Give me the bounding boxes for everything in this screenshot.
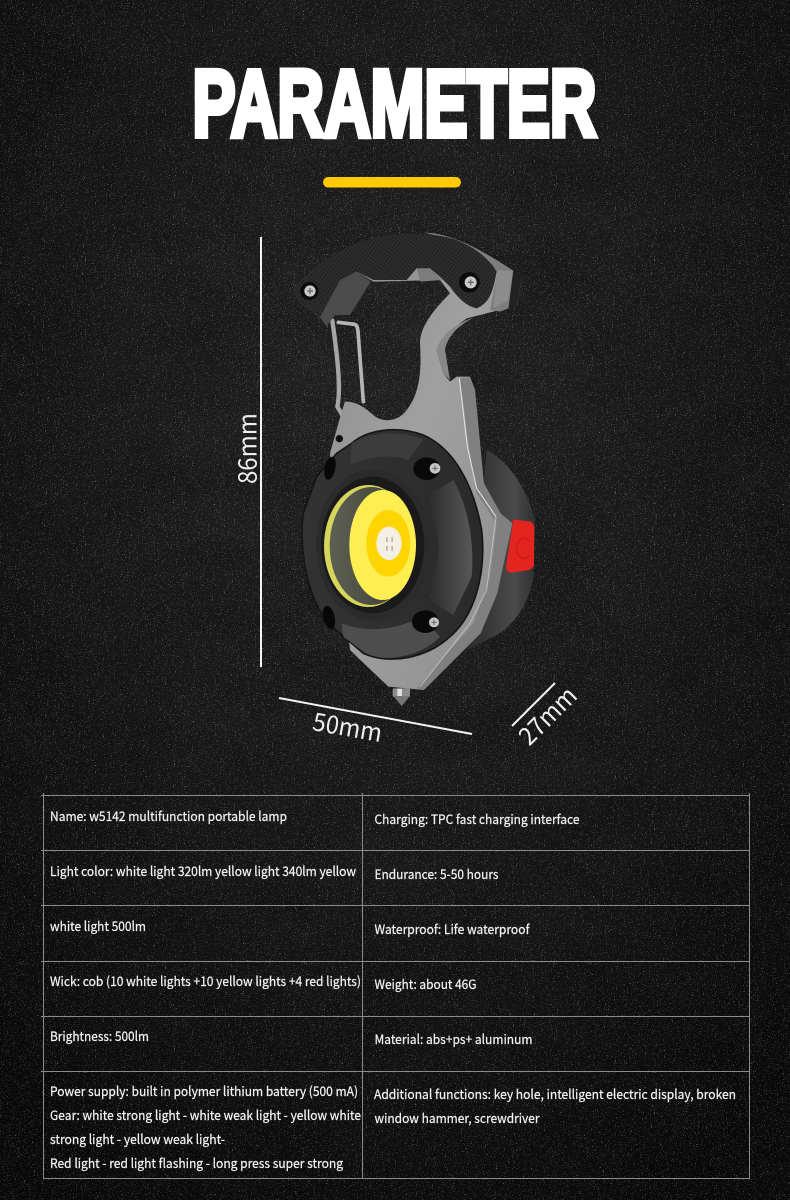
disc bottom facet [342,617,440,658]
handle metal cap [423,233,522,312]
key hole [336,435,343,442]
disc top facet [350,433,423,465]
left column: strong light - yellow weak light- [50,1129,225,1148]
lower screw [412,610,439,633]
parameter table [41,793,750,1179]
wire clip [332,321,363,414]
disc right panel [423,480,472,615]
textured grip [293,234,497,317]
grip screw right [459,272,480,293]
title: PARAMETER [192,51,596,157]
dimension: width 50mm: 50mm [310,702,385,750]
front disc [302,430,483,659]
side holes [321,456,338,630]
lens glass [324,485,413,607]
left column: Brightness: 500lm [50,1026,149,1045]
dimension: width 50mm [279,698,472,750]
red power button [506,519,534,573]
left column: Gear: white strong light - white weak light - yellow white [50,1105,361,1124]
left column: Power supply: built in polymer lithium battery (500 mA) [50,1081,358,1100]
right column: Waterproof: Life waterproof [374,919,530,938]
left column: Red light - red light flashing - long press super strong [50,1153,344,1172]
dimension: depth 27mm: 27mm [509,677,584,752]
right column: window hammer, screwdriver [374,1108,540,1127]
rear housing [467,450,535,650]
right column: Additional functions: key hole, intelligent electric display, broken [374,1084,736,1103]
upper screw [413,457,440,480]
COB light [349,490,416,600]
metal bevel [417,377,512,690]
left column: Name: w5142 multifunction portable lamp [50,806,287,825]
left column: Light color: white light 320lm yellow light 340lm yellow [50,861,357,880]
lens surround [316,469,431,621]
right column: Material: abs+ps+ aluminum [374,1029,532,1048]
lamp head [302,430,534,706]
right column: Weight: about 46G [374,974,476,993]
left column: white light 500lm [50,916,146,935]
left column: Wick: cob (10 white lights +10 yellow lights +4 red lights) [50,971,361,990]
left column [50,806,361,1172]
right column [374,809,736,1127]
accent bar [323,177,461,188]
dimension: height 86mm: 86mm [228,413,264,484]
right column: Endurance: 5-50 hours [374,864,498,883]
product: multifunction lamp [293,233,535,706]
right column: Charging: TPC fast charging interface [374,809,580,828]
grip screw left [300,282,318,300]
metal frame [318,243,522,690]
window breaker tip [393,688,410,706]
table grid [41,793,750,1179]
